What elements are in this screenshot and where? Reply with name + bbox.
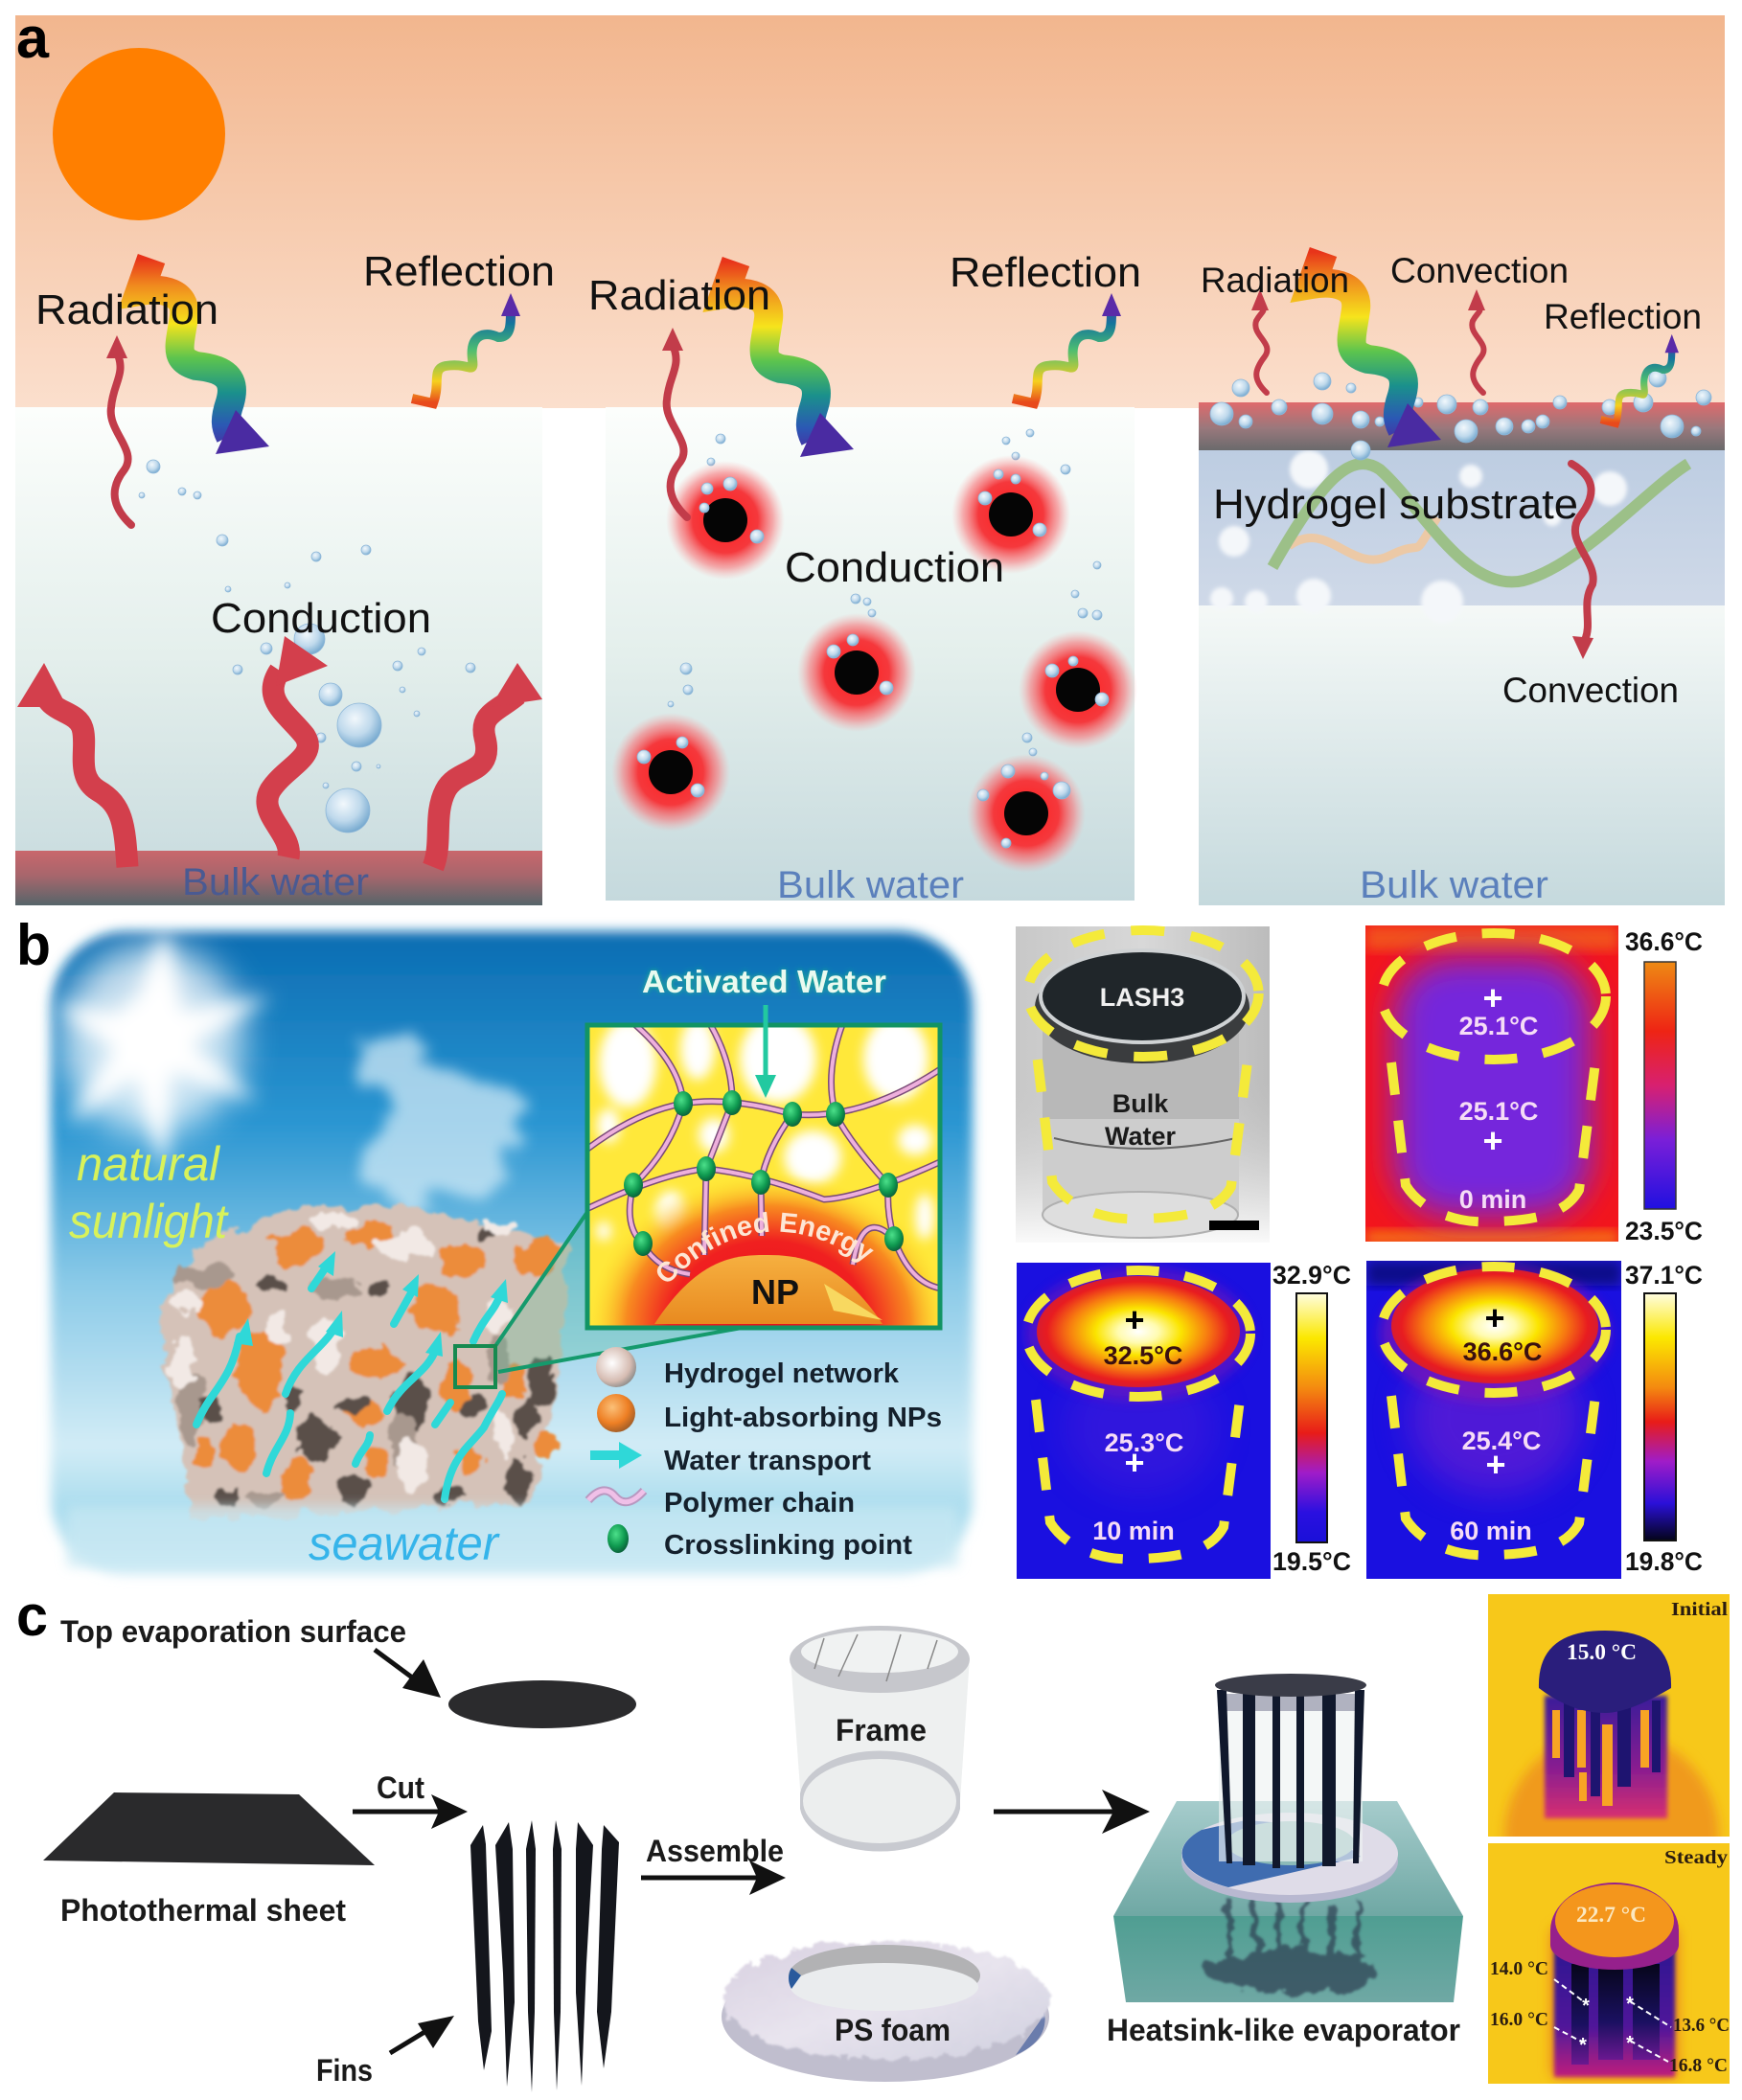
confined energy text: Confined Energy — [657, 1211, 874, 1282]
label: fins: Fins — [316, 2053, 373, 2088]
rainbow reflection arrows — [412, 293, 1679, 423]
colour bar: 0 min: 23.5°C — [1625, 1217, 1703, 1245]
hydrogel block — [159, 1205, 565, 1518]
labels: panel a: Reflection — [363, 248, 555, 295]
top surface disc — [448, 1680, 636, 1728]
legend text: Polymer chain — [664, 1488, 855, 1518]
arrow: to evaporator — [994, 1790, 1150, 1834]
arrow: activated water — [755, 1005, 776, 1098]
thermal image: 10 min: 10 min — [1092, 1517, 1175, 1545]
photo of beaker: LASH3 — [1100, 983, 1184, 1012]
thermal image: 60 min: 60 min — [1450, 1517, 1532, 1545]
sky background — [15, 15, 1725, 408]
photo of beaker: Water — [1105, 1122, 1176, 1151]
thermal image: 10 min: + — [1124, 1443, 1145, 1482]
legend text: Hydrogel network — [664, 1358, 900, 1389]
nanoparticle dome — [654, 1255, 882, 1324]
thermal image: steady: 22.7 °C — [1576, 1903, 1646, 1927]
arrow: fins — [390, 2016, 454, 2053]
thermal image: steady: Steady — [1664, 1847, 1728, 1868]
legend icons — [588, 1347, 644, 1553]
photo of beaker — [1016, 926, 1270, 1243]
thermal image: 0 min: 0 min — [1459, 1185, 1526, 1214]
thermal image: 10 min: 25.3°C — [1105, 1428, 1183, 1457]
colour bar: 0 min: 36.6°C — [1625, 927, 1703, 956]
thermal image: steady: * — [1579, 2035, 1587, 2056]
thermal image: steady: * — [1626, 2033, 1634, 2054]
thermal image: initial: 15.0 °C — [1567, 1640, 1637, 1664]
thermal image: steady: * — [1626, 1994, 1634, 2015]
fins — [470, 1820, 619, 2092]
sun — [53, 48, 225, 220]
labels: panel a: Radiation — [35, 286, 218, 333]
thermal image: steady — [1488, 1843, 1730, 2084]
rainbow radiation arrows — [140, 252, 1441, 457]
red emission arrows — [106, 289, 1593, 659]
arrow: assemble — [641, 1860, 786, 1895]
sea surface overlay — [67, 1506, 958, 1567]
colour bar: 10 min — [1272, 1261, 1351, 1576]
thermal image: 60 min: 25.4°C — [1462, 1427, 1541, 1455]
labels: panel a: Reflection — [950, 249, 1141, 296]
natural sunlight label: natural — [77, 1137, 221, 1191]
labels: panel a: Hydrogel substrate — [1213, 481, 1578, 528]
thermal image: 60 min: + — [1484, 1298, 1505, 1337]
thermal image: steady: 14.0 °C — [1490, 1958, 1548, 1979]
thermal image: steady: 13.6 °C — [1673, 2015, 1730, 2036]
legend — [588, 1347, 942, 1561]
thermal image: 10 min — [1017, 1263, 1271, 1579]
label c: c — [16, 1584, 48, 1648]
activated water title: Activated Water — [642, 964, 886, 999]
thermal image: 0 min — [1365, 925, 1618, 1245]
seawater label: seawater — [309, 1517, 500, 1570]
thermal image: 0 min: 25.1°C — [1459, 1097, 1538, 1126]
panel b: thermal images — [1016, 925, 1703, 1579]
thermal image: 0 min: 25.1°C — [1459, 1012, 1538, 1040]
tank 3: interfacial heating — [1199, 402, 1725, 905]
label: photothermal sheet: Photothermal sheet — [60, 1893, 346, 1928]
legend text — [664, 1358, 942, 1561]
label: evaporator: Heatsink-like evaporator — [1107, 2013, 1460, 2047]
labels: panel a: Reflection — [1544, 297, 1702, 336]
labels: panel a: Conduction — [211, 595, 431, 642]
thermal image: 60 min: 36.6°C — [1463, 1337, 1542, 1366]
labels: panel a: Bulk water — [777, 864, 964, 906]
crosslinking nodes — [624, 1090, 904, 1256]
bubbles on nanoparticles — [637, 469, 1109, 848]
heated nanoparticles — [611, 455, 1137, 873]
thermal image: steady: 16.8 °C — [1669, 2055, 1728, 2076]
tank 1: bulk heating — [15, 407, 542, 905]
colour bar: 60 min: 19.8°C — [1625, 1547, 1703, 1576]
legend text: Water transport — [664, 1446, 871, 1476]
label: assemble: Assemble — [646, 1834, 784, 1868]
colour bar: 60 min: 37.1°C — [1625, 1261, 1703, 1290]
labels: panel a: Convection — [1502, 671, 1679, 710]
photo of beaker: Bulk — [1112, 1089, 1169, 1118]
heatsink-like evaporator — [1113, 1674, 1463, 2002]
label: top evaporation surface: Top evaporation surface — [60, 1614, 406, 1649]
arrow: cut — [353, 1794, 468, 1829]
labels: panel a: Radiation — [588, 272, 770, 319]
thermal image: 0 min: + — [1482, 1121, 1503, 1160]
colour bar: 10 min: 19.5°C — [1272, 1547, 1351, 1576]
sky and sea background — [51, 931, 973, 1575]
thermal image: 10 min: 32.5°C — [1104, 1341, 1182, 1370]
thermal image: initial — [1488, 1594, 1730, 1837]
thermal image: 10 min: + — [1124, 1300, 1145, 1339]
bubbles: surface layer tank 3 — [1210, 370, 1711, 460]
arrow to surface — [375, 1650, 441, 1698]
panel a: photothermal heating modes — [15, 6, 1725, 906]
water transport arrows — [196, 1251, 508, 1499]
natural sunlight label — [69, 1137, 229, 1248]
colour bar: 0 min — [1625, 927, 1703, 1245]
thermal image: 0 min: + — [1482, 978, 1503, 1017]
activated water title: Activated Water — [642, 964, 886, 999]
frame — [790, 1626, 970, 1852]
colour bar: 60 min — [1625, 1261, 1703, 1576]
label: cut: Cut — [377, 1770, 424, 1805]
thermal image: steady: 16.0 °C — [1490, 2009, 1548, 2030]
natural sunlight label: sunlight — [69, 1195, 229, 1248]
bubbles: tank 1 — [139, 460, 475, 833]
label b: b — [16, 913, 51, 977]
PS foam: PS foam — [835, 2013, 951, 2047]
thermal image: 60 min: + — [1485, 1445, 1506, 1484]
tank 2: nanoparticle heating — [606, 407, 1135, 901]
thermal image: 60 min — [1366, 1261, 1621, 1579]
PS foam — [722, 1941, 1049, 2082]
frame: Frame — [836, 1713, 927, 1747]
labels: panel a: Bulk water — [182, 861, 369, 903]
panel b: hydrogel evaporator illustration — [16, 913, 1730, 2092]
panel c: heatsink-like evaporator assembly — [16, 1584, 1730, 2092]
big heat arrows — [17, 636, 542, 867]
legend text: Crosslinking point — [664, 1530, 912, 1561]
water vapour — [360, 1035, 517, 1217]
legend text: Light-absorbing NPs — [664, 1403, 942, 1433]
thermal image: steady: * — [1582, 1996, 1590, 2017]
labels: panel a: Bulk water — [1360, 864, 1548, 906]
thermal image: initial: Initial — [1671, 1599, 1728, 1620]
inset: polymer network — [69, 964, 943, 1570]
inset border — [587, 1025, 940, 1328]
labels: panel a: Convection — [1390, 251, 1569, 290]
bubbles: tank 2 — [668, 429, 1102, 756]
labels: panel a — [35, 248, 1702, 906]
label a: a — [16, 6, 50, 70]
NP text: NP — [751, 1272, 799, 1312]
labels: panel a: Radiation — [1201, 261, 1349, 300]
polymer chains — [586, 1022, 942, 1289]
photothermal sheet — [43, 1792, 375, 1865]
zoom connector — [455, 1212, 763, 1387]
labels: panel a: Conduction — [785, 544, 1004, 591]
colour bar: 10 min: 32.9°C — [1272, 1261, 1351, 1290]
sun burst — [56, 927, 273, 1174]
